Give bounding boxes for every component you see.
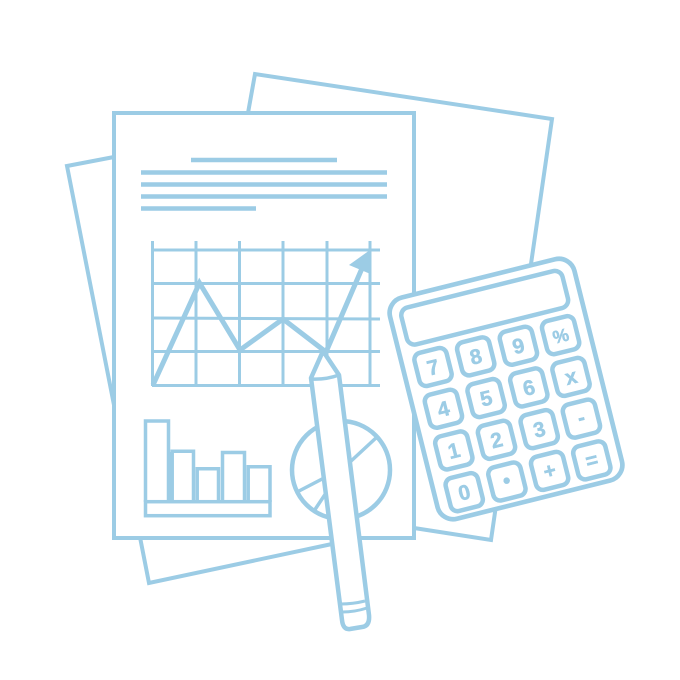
- keypad labels: 7: [425, 355, 442, 381]
- back sheet: left: [67, 157, 332, 583]
- report heading lines: [141, 160, 387, 208]
- keypad labels: %: [551, 325, 571, 348]
- keypad labels: [425, 323, 603, 506]
- keypad labels: 3: [531, 418, 548, 443]
- calculator display: [400, 269, 570, 346]
- pencil: [311, 351, 369, 629]
- bar chart: [146, 421, 270, 516]
- keypad labels: 4: [435, 397, 452, 422]
- back sheet: right: [248, 74, 552, 540]
- keypad labels: x: [563, 365, 580, 390]
- keypad labels: =: [583, 448, 601, 473]
- keypad labels: 8: [467, 345, 485, 370]
- keypad: [413, 315, 612, 513]
- line chart: [152, 241, 380, 386]
- keypad labels: 2: [488, 428, 505, 453]
- keypad labels: 0: [456, 481, 473, 506]
- keypad labels: 1: [446, 439, 463, 464]
- keypad labels: 6: [521, 376, 537, 401]
- keypad labels: +: [541, 459, 558, 484]
- keypad labels: 9: [510, 334, 527, 359]
- keypad labels: •: [500, 469, 513, 493]
- pie chart: [292, 421, 390, 519]
- front report page: [114, 113, 414, 538]
- calculator: [386, 255, 626, 523]
- calculator body: [386, 255, 626, 523]
- keypad labels: -: [575, 406, 587, 430]
- keypad labels: 5: [478, 386, 495, 412]
